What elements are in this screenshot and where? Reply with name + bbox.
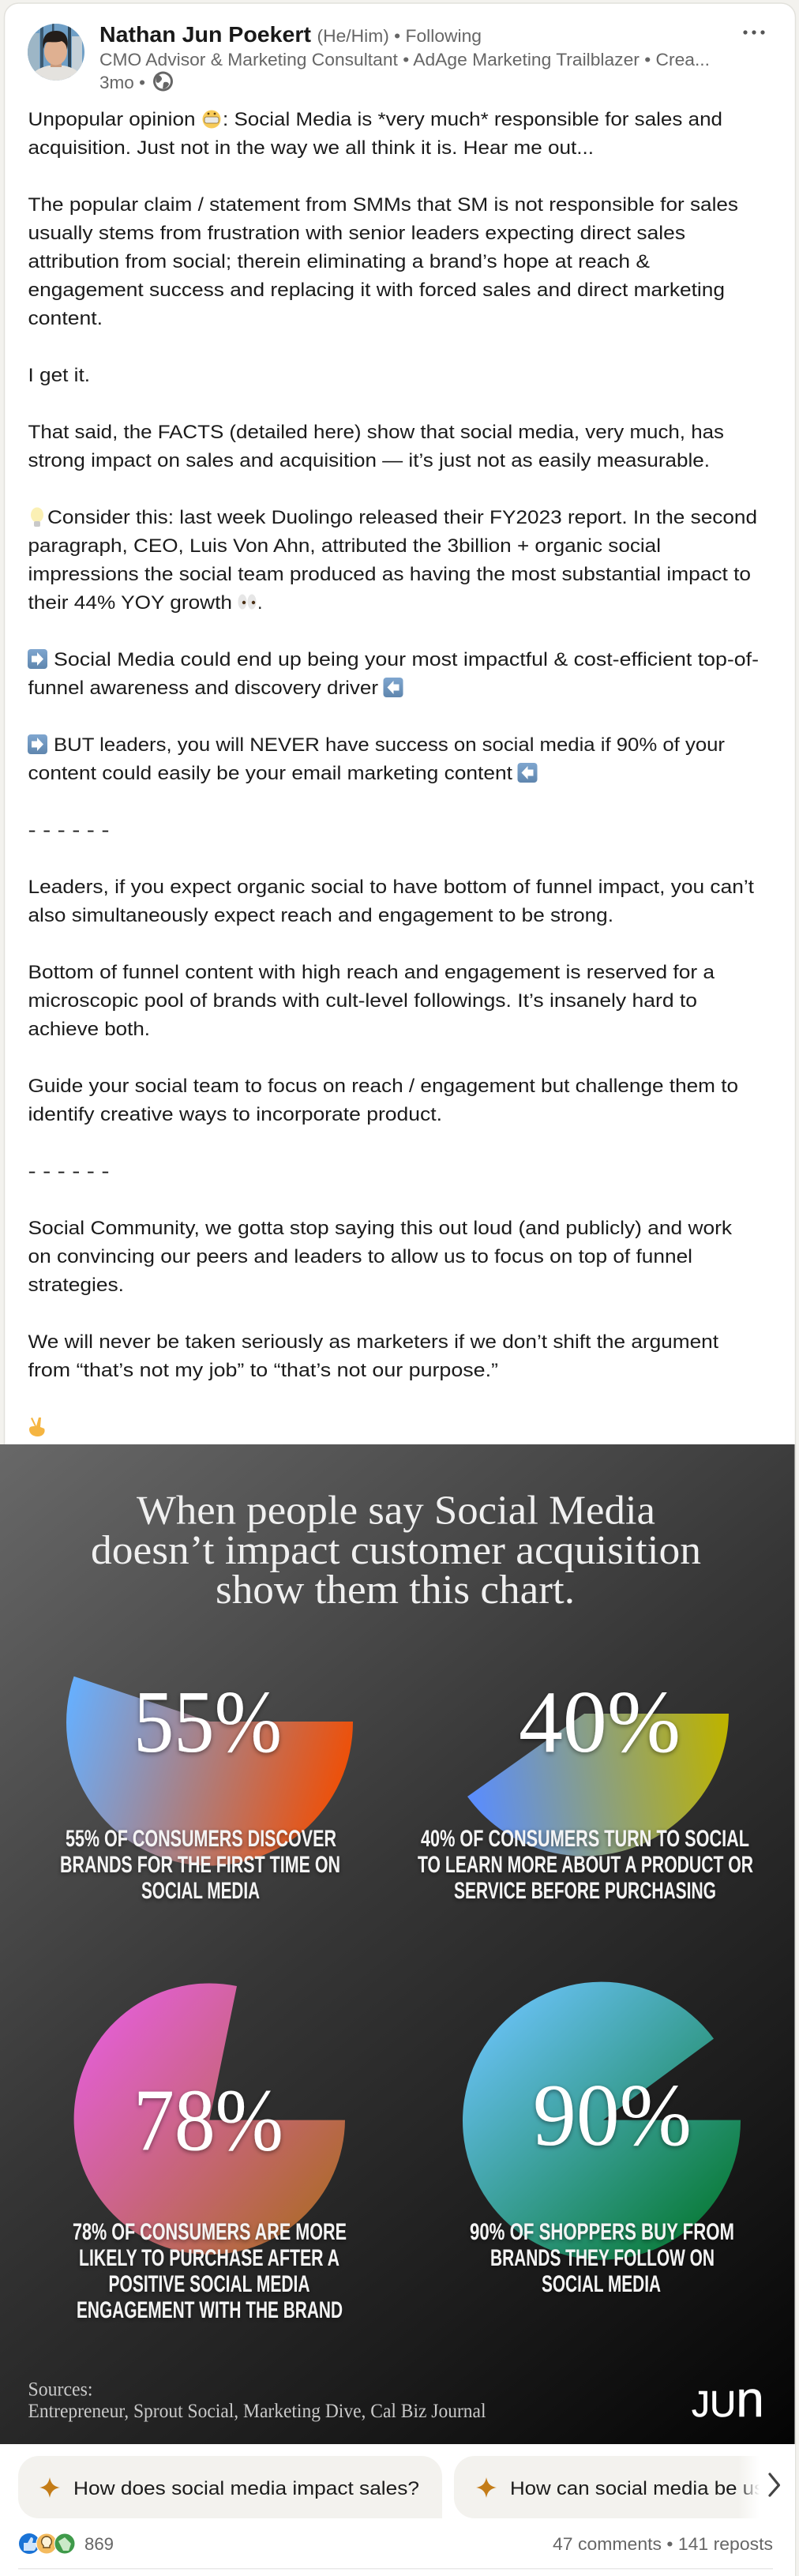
chip: how can social media be used: How can social media be us (510, 2478, 764, 2499)
caption 78%: POSITIVE SOCIAL MEDIA (109, 2271, 309, 2297)
text: Duolingo paragraph: Consider this: last week Duolingo released their FY2023 report. In the second (47, 507, 757, 528)
text: social community paragraph: Social Community, we gotta stop saying this out loud (and publicly) and work (28, 1218, 733, 1239)
chart: 78 percent more likely to purchase (73, 1983, 347, 2323)
text: opening paragraph: acquisition. Just not in the way we all think it is. Hear me out... (28, 137, 594, 159)
text: Duolingo paragraph: . (257, 592, 262, 614)
engagement bar (18, 2533, 773, 2570)
text: opening paragraph: Unpopular opinion (28, 109, 195, 130)
text: bottom of funnel paragraph: microscopic pool of brands with cult-level followings. It’s insanely hard to (28, 990, 697, 1012)
icon: grimacing face emoji (202, 111, 221, 128)
icon: like (19, 2533, 39, 2554)
text: social community paragraph: strategies. (28, 1275, 124, 1296)
icon: sparkle (476, 2477, 497, 2498)
text: closing paragraph: We will never be taken seriously as marketers if we don’t shift the argument (28, 1331, 718, 1353)
caption 78%: 78% OF CONSUMERS ARE MORE (73, 2219, 347, 2245)
title (91, 1488, 701, 1613)
caption 55%: SOCIAL MEDIA (141, 1878, 260, 1904)
text: leaders paragraph: Leaders, if you expect organic social to have bottom of funnel impact, you can’t (28, 877, 754, 898)
post age: 3mo • (99, 73, 145, 92)
figure 55%: 55% (133, 1673, 282, 1771)
pie sector 40% (467, 1714, 729, 1856)
icon: right arrow emoji (28, 649, 47, 669)
text: social community paragraph (28, 1218, 733, 1296)
text: facts paragraph: strong impact on sales and acquisition — it’s just not as easily measurable. (28, 450, 710, 471)
text: leaders paragraph: also simultaneously expect reach and engagement to be strong. (28, 905, 613, 926)
text: leaders paragraph (28, 877, 754, 926)
icon: left arrow emoji (518, 763, 537, 783)
text: closing paragraph (28, 1331, 718, 1381)
callout: email marketing warning (28, 734, 725, 784)
icon: left arrow emoji (384, 678, 403, 697)
chart: 55 percent discover brands (60, 1673, 353, 1904)
text: I get it: I get it. (28, 365, 90, 386)
caption 40% (418, 1826, 753, 1904)
pie sector 55% (66, 1677, 353, 1866)
icon: sparkle (39, 2477, 60, 2498)
icon: eyes emoji (238, 594, 256, 610)
caption 78% (73, 2219, 347, 2323)
caption 78%: LIKELY TO PURCHASE AFTER A (79, 2245, 339, 2271)
text: Duolingo paragraph: paragraph, CEO, Luis Von Ahn, attributed the 3billion + organic social (28, 535, 661, 557)
reaction icons (19, 2533, 75, 2554)
caption 90%: SOCIAL MEDIA (542, 2271, 661, 2297)
figure 40%: 40% (519, 1673, 681, 1771)
caption 90% (470, 2219, 734, 2297)
text: opening paragraph: : Social Media is *very much* responsible for sales and (223, 109, 722, 130)
text: facts paragraph (28, 422, 724, 471)
post header (28, 22, 765, 92)
pronouns and following status: (He/Him) • Following (317, 26, 482, 46)
icon: right arrow emoji (28, 734, 47, 754)
callout: top-of-funnel driver: funnel awareness and discovery driver (28, 678, 378, 699)
text: popular claim paragraph: content. (28, 308, 103, 329)
post body text: - - - - - - (28, 820, 109, 841)
figure 78%: 78% (133, 2072, 283, 2170)
title: show them this chart. (216, 1568, 575, 1613)
avatar: portrait photo (28, 24, 84, 81)
text: popular claim paragraph: The popular claim / statement from SMMs that SM is not responsible for sales (28, 194, 738, 216)
author headline: CMO Advisor & Marketing Consultant • AdAge Marketing Trailblazer • Crea... (99, 50, 710, 69)
reaction count: 869 (84, 2534, 114, 2554)
text: popular claim paragraph: usually stems from frustration with senior leaders expecting direct sales (28, 223, 685, 244)
text: facts paragraph: That said, the FACTS (detailed here) show that social media, very much, has (28, 422, 724, 443)
logo: JUN: JUn (692, 2371, 764, 2428)
text: guide your social team paragraph: identify creative ways to incorporate product. (28, 1104, 442, 1125)
post body text: - - - - - - (28, 1161, 109, 1182)
chip: how can social media be used (454, 2456, 764, 2518)
icon: chevron right (770, 2474, 778, 2495)
text: opening paragraph (28, 109, 722, 159)
callout: email marketing warning: BUT leaders, you will NEVER have success on social media if 90% of your (54, 734, 725, 756)
callout: top-of-funnel driver: Social Media could end up being your most impactful & cost-efficient top-of- (54, 649, 759, 670)
text: social community paragraph: on convincing our peers and leaders to allow us to focus on top of funnel (28, 1246, 692, 1267)
pie sector 90% (463, 1982, 741, 2260)
text: bottom of funnel paragraph (28, 962, 715, 1040)
text: guide your social team paragraph: Guide your social team to focus on reach / engagement but challenge them to (28, 1076, 738, 1097)
text: Duolingo paragraph (28, 507, 757, 614)
icon: insightful (36, 2533, 57, 2554)
image background (0, 1444, 794, 2444)
caption 55% (60, 1826, 340, 1904)
text: Duolingo paragraph: impressions the social team produced as having the most substantial impact to (28, 564, 751, 585)
figure 90%: 90% (533, 2067, 692, 2165)
sources: Entrepreneur, Sprout Social, Marketing Dive, Cal Biz Journal (28, 2401, 486, 2422)
chip: how does social media impact sales (18, 2456, 442, 2518)
post body text (28, 109, 759, 1436)
chart: 40 percent learn more (418, 1673, 753, 1904)
text: popular claim paragraph: engagement success and replacing it with forced sales and direct marketing (28, 280, 725, 301)
text: popular claim paragraph: attribution from social; therein eliminating a brand’s hope at reach & (28, 251, 650, 272)
callout: email marketing warning: content could easily be your email marketing content (28, 763, 512, 784)
pie sector 78% (74, 1983, 345, 2255)
title: When people say Social Media (137, 1488, 655, 1534)
author name: Nathan Jun Poekert (99, 22, 311, 47)
chart: 90 percent buy from followed brands (463, 1982, 741, 2297)
text: bottom of funnel paragraph: Bottom of funnel content with high reach and engagement is reserved for a (28, 962, 715, 983)
text: popular claim paragraph (28, 194, 738, 329)
text: bottom of funnel paragraph: achieve both. (28, 1019, 150, 1040)
icon: more options (743, 30, 765, 35)
icon: globe (153, 71, 173, 92)
icon: light bulb emoji (31, 507, 43, 527)
text: closing paragraph: from “that’s not my job” to “that’s not our purpose.” (28, 1360, 498, 1381)
caption 55%: BRANDS FOR THE FIRST TIME ON (60, 1852, 340, 1878)
icon: victory hand emoji (29, 1418, 45, 1436)
sources: Sources: (28, 2379, 93, 2401)
icon: celebrate (54, 2533, 75, 2554)
text: Duolingo paragraph: their 44% YOY growth (28, 592, 232, 614)
suggested question chips (18, 2456, 778, 2518)
text: guide your social team paragraph (28, 1076, 738, 1125)
caption 78%: ENGAGEMENT WITH THE BRAND (77, 2297, 343, 2323)
title: doesn’t impact customer acquisition (91, 1528, 701, 1573)
callout: top-of-funnel driver (28, 649, 759, 699)
chip: how does social media impact sales: How does social media impact sales? (73, 2478, 419, 2499)
comment and repost counts: 47 comments • 141 reposts (553, 2534, 773, 2554)
sources (28, 2379, 486, 2422)
infographic image (0, 1444, 794, 2444)
caption 55%: 55% OF CONSUMERS DISCOVER (66, 1826, 336, 1852)
